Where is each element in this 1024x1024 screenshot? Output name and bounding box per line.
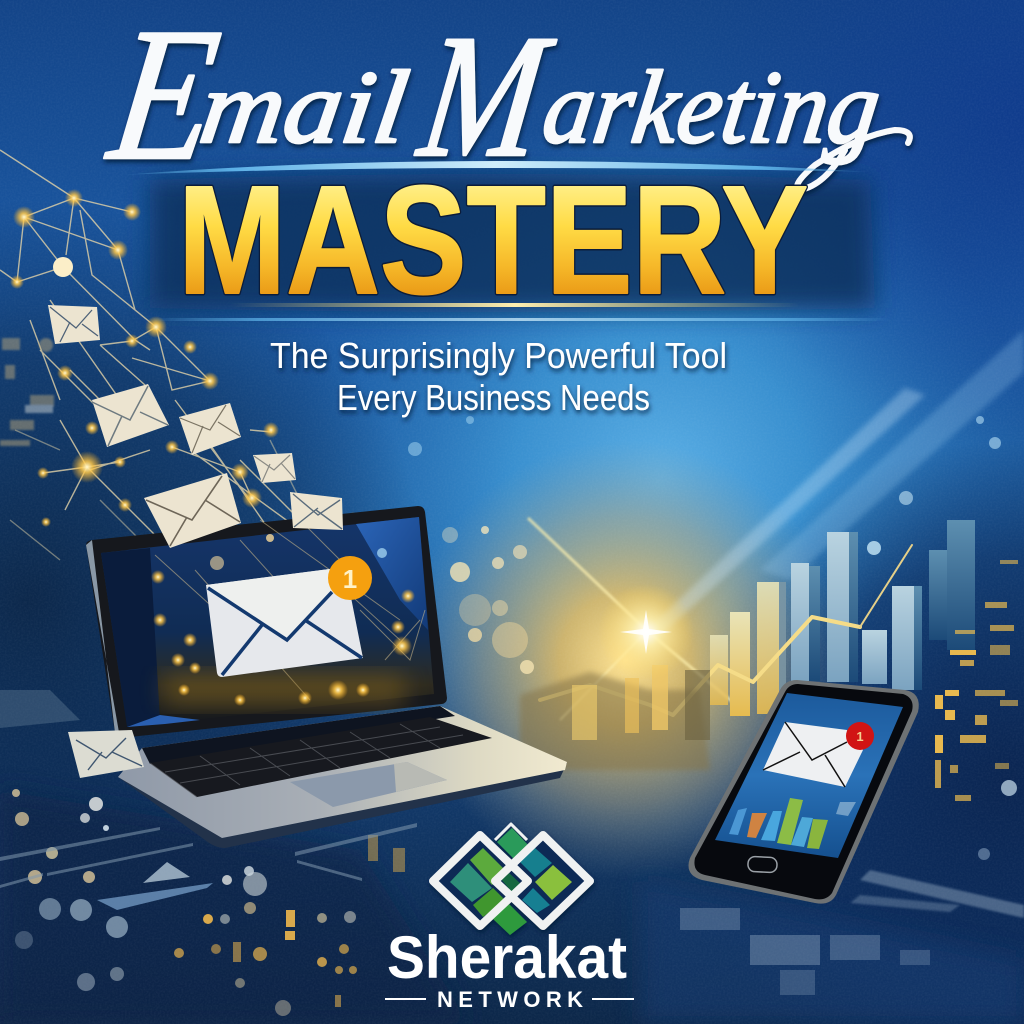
badge <box>328 556 372 600</box>
flying envelopes <box>48 305 343 778</box>
envelope 7 <box>68 730 144 778</box>
network nodes <box>10 189 358 549</box>
light rays <box>528 330 1024 720</box>
envelope 2 <box>92 384 169 447</box>
title: Email Marketing: mail <box>194 49 415 165</box>
bar chart <box>710 520 975 716</box>
envelope 1 <box>48 305 100 344</box>
envelope 4 <box>253 453 296 483</box>
bottom-left glass shards <box>0 690 417 910</box>
title: MASTERY: MASTERY <box>178 154 808 326</box>
subtitle: Every Business Needs <box>337 377 650 418</box>
logo <box>385 824 634 1012</box>
bottom-left gold lights <box>174 835 405 1007</box>
city lights <box>520 560 1018 801</box>
logo mark <box>433 824 590 935</box>
phone bar chart <box>729 798 856 849</box>
central bokeh <box>408 416 534 674</box>
divider below MASTERY <box>150 303 890 321</box>
title: Email Marketing: arketing <box>537 49 887 165</box>
big envelope with badge <box>206 556 372 677</box>
title: MASTERY: MASTERY <box>178 154 808 326</box>
laptop <box>86 506 567 848</box>
envelope 3 <box>179 403 241 455</box>
subtitle: The Surprisingly Powerful Tool <box>270 335 727 376</box>
badge: 1 <box>343 564 357 594</box>
laptop lid <box>86 506 447 738</box>
left edge smudges <box>0 338 54 446</box>
title: Email Marketing: M <box>408 0 563 194</box>
right bokeh <box>867 416 1017 860</box>
home button <box>748 856 777 873</box>
starburst <box>598 584 694 680</box>
envelope 5 <box>144 473 241 548</box>
smartphone <box>688 680 919 904</box>
dark band behind MASTERY <box>150 174 875 312</box>
logo tagline: NETWORK <box>437 987 583 1012</box>
phone envelope <box>763 722 874 787</box>
phone screen <box>715 693 903 858</box>
reflection blocks <box>680 870 1024 995</box>
laptop base <box>118 706 567 848</box>
divider above MASTERY <box>120 161 870 175</box>
network constellation <box>0 150 330 560</box>
subtitle <box>270 335 727 418</box>
phone badge: 1 <box>856 729 864 744</box>
envelope 6 <box>290 492 343 530</box>
logo wordmark: Sherakat <box>387 924 627 991</box>
title: Email Marketing <box>98 0 910 200</box>
trend line <box>540 545 912 715</box>
bottom-left bokeh <box>12 789 356 1016</box>
